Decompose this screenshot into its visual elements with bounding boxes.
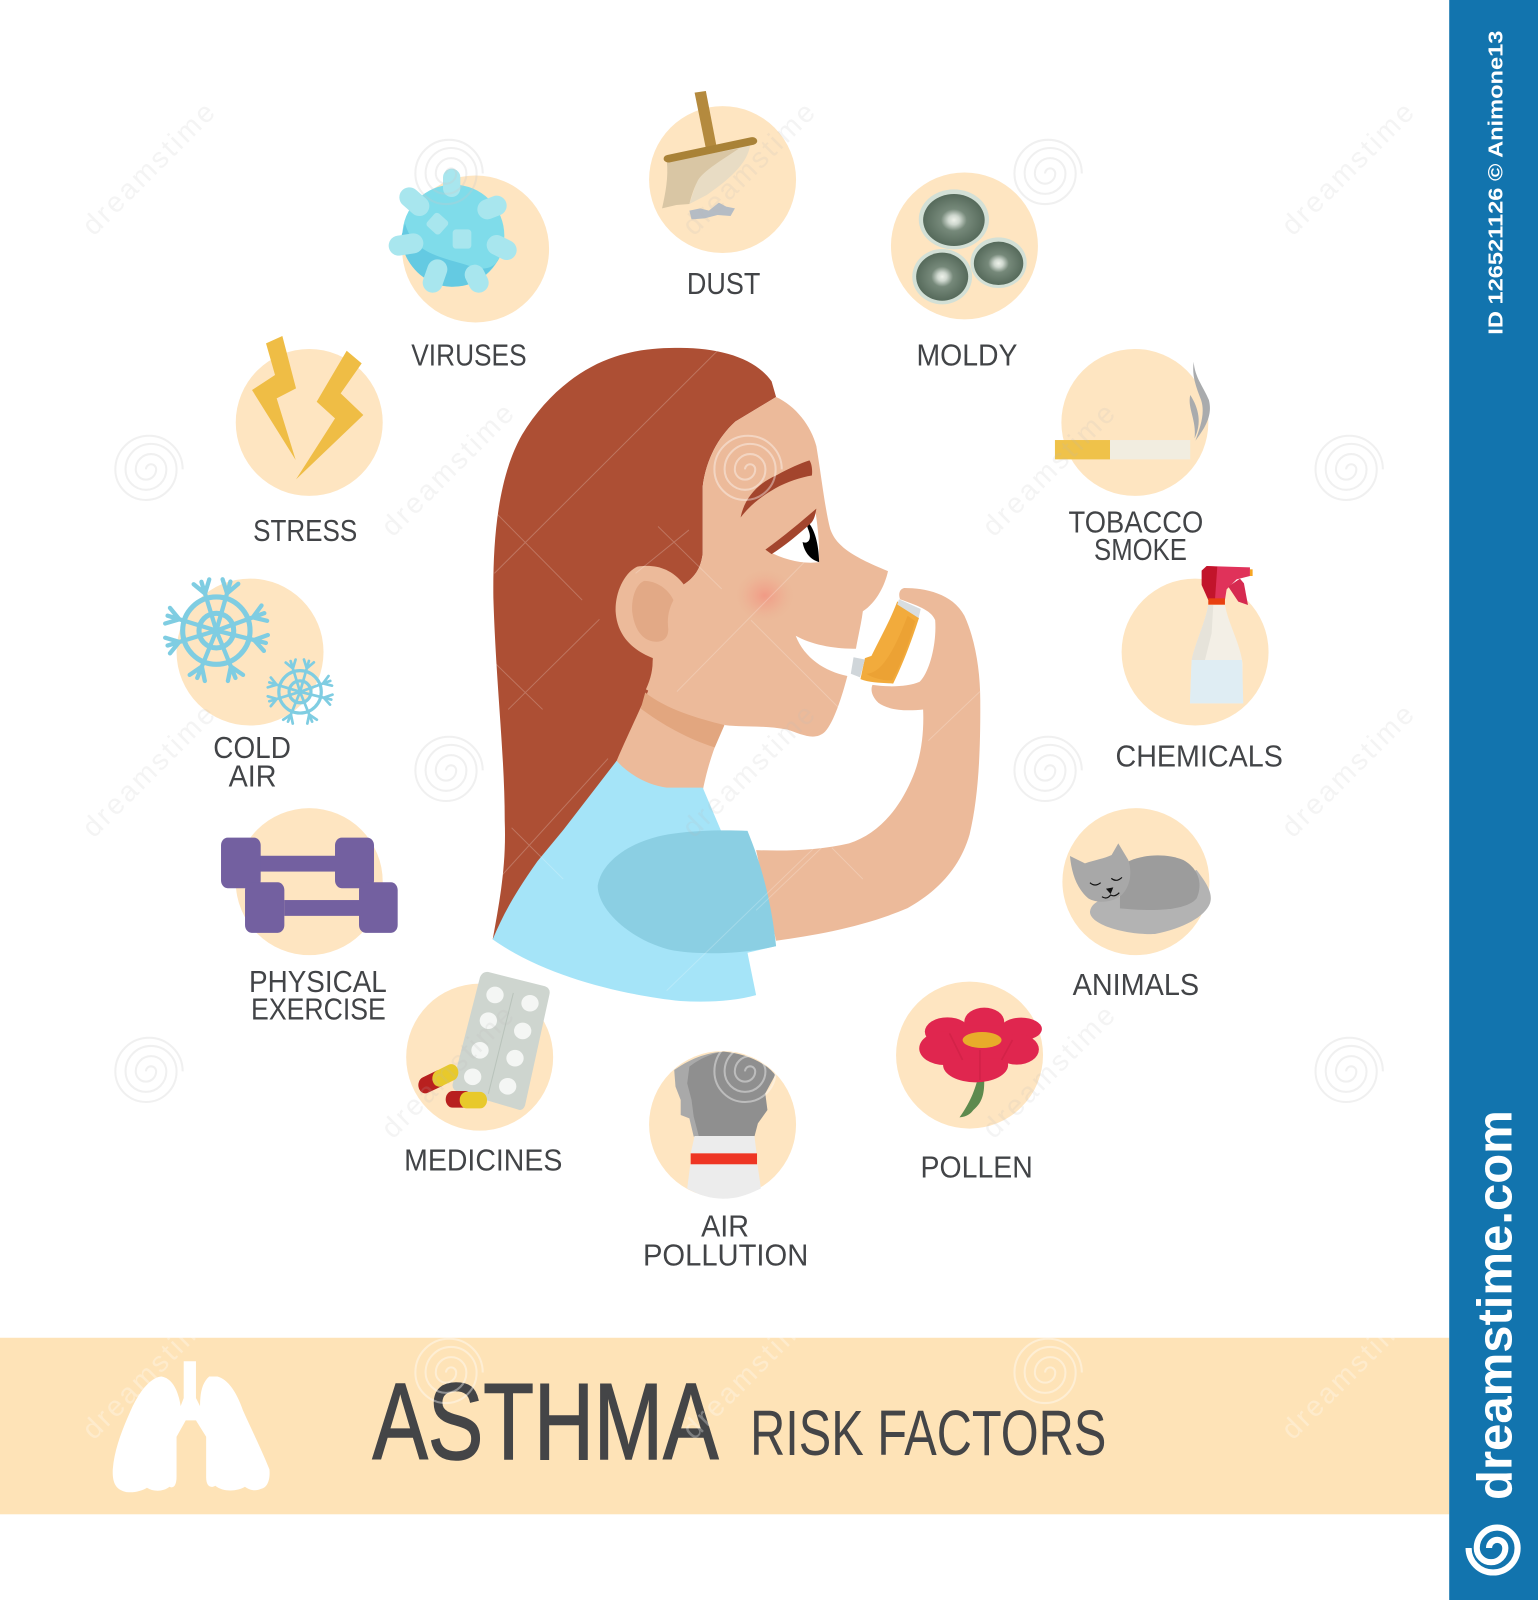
watermark text: dreamstime bbox=[375, 398, 520, 543]
watermark text: dreamstime bbox=[375, 1000, 520, 1145]
label: moldy: MOLDY bbox=[916, 338, 1018, 372]
icon: lungs bbox=[113, 1361, 270, 1492]
label: cold: COLD bbox=[213, 731, 291, 765]
illustration: girl using inhaler bbox=[493, 348, 980, 1002]
neck bbox=[611, 660, 725, 803]
icon: snowflake small bbox=[268, 660, 332, 724]
hair bbox=[493, 348, 776, 939]
title: asthma: ASTHMA bbox=[373, 1361, 718, 1482]
label: air (pollution): AIR bbox=[701, 1210, 749, 1244]
icon: chemical spray bottle bbox=[1190, 566, 1253, 703]
subtitle: risk factors: RISK FACTORS bbox=[750, 1397, 1106, 1469]
icon: stress lightning bolts bbox=[252, 336, 363, 479]
watermark text bbox=[76, 97, 1421, 1446]
label: air: AIR bbox=[229, 760, 277, 794]
label: pollen: POLLEN bbox=[921, 1151, 1033, 1185]
face bbox=[646, 397, 888, 737]
label: physical: PHYSICAL bbox=[249, 965, 387, 999]
watermark text: dreamstime bbox=[676, 97, 822, 242]
label: medicines: MEDICINES bbox=[404, 1143, 562, 1177]
icon: flower pollen bbox=[919, 1008, 1042, 1117]
neck shadow bbox=[641, 692, 724, 747]
watermark spirals bbox=[115, 140, 1383, 1102]
shirt bbox=[493, 761, 776, 1002]
label: tobacco: TOBACCO bbox=[1069, 506, 1203, 540]
label: smoke: SMOKE bbox=[1094, 533, 1187, 567]
watermark text: dreamstime bbox=[76, 97, 221, 242]
watermark text: dreamstime bbox=[1275, 97, 1421, 242]
icon: dust broom bbox=[662, 91, 752, 219]
eye bbox=[765, 509, 819, 563]
watermark text: dreamstime bbox=[676, 699, 822, 844]
watermark text: dreamstime bbox=[76, 1301, 221, 1446]
inhaler bbox=[851, 599, 921, 684]
sidebar brand text: dreamstime.com bbox=[1468, 1110, 1522, 1500]
icon: mold spots bbox=[912, 189, 1027, 304]
label: exercise: EXERCISE bbox=[251, 992, 386, 1026]
sidebar id text: ID 126521126 © Animone13 bbox=[1485, 31, 1507, 335]
panel: risk factor circles bbox=[177, 106, 1269, 1198]
icon: viruses bbox=[399, 177, 507, 287]
watermark text: dreamstime bbox=[1275, 1301, 1421, 1446]
sidebar logo bbox=[1469, 1528, 1518, 1572]
label: animals: ANIMALS bbox=[1073, 968, 1199, 1002]
watermark text: dreamstime bbox=[76, 699, 221, 844]
icon: medicines bbox=[425, 972, 550, 1110]
icon: factory chimney air pollution bbox=[674, 1052, 775, 1199]
title band bbox=[0, 1338, 1449, 1514]
icon: cigarette with smoke bbox=[1055, 362, 1210, 459]
watermark text: dreamstime bbox=[1275, 699, 1421, 844]
cheek blush bbox=[734, 568, 796, 623]
watermark lines bbox=[494, 350, 980, 991]
watermark text: dreamstime bbox=[976, 398, 1122, 543]
label: chemicals: CHEMICALS bbox=[1115, 739, 1283, 773]
label: stress: STRESS bbox=[253, 514, 357, 548]
label: dust: DUST bbox=[687, 267, 760, 301]
ear bbox=[616, 566, 684, 658]
eyebrow bbox=[741, 460, 812, 518]
sleeve shadow bbox=[598, 830, 776, 953]
icon: snowflake large bbox=[165, 579, 268, 681]
inner ear bbox=[632, 581, 673, 642]
labels bbox=[213, 267, 1283, 1272]
watermark text: dreamstime bbox=[976, 1000, 1122, 1145]
label: viruses: VIRUSES bbox=[411, 338, 527, 372]
watermark text: dreamstime bbox=[676, 1301, 822, 1446]
sidebar bbox=[1449, 0, 1538, 1600]
icon: sleeping cat bbox=[1070, 843, 1211, 934]
icon: dumbbells bbox=[221, 838, 398, 933]
arm and hand bbox=[756, 588, 980, 941]
label: pollution: POLLUTION bbox=[643, 1238, 808, 1272]
watermark spirals on colour bbox=[415, 436, 1082, 1403]
